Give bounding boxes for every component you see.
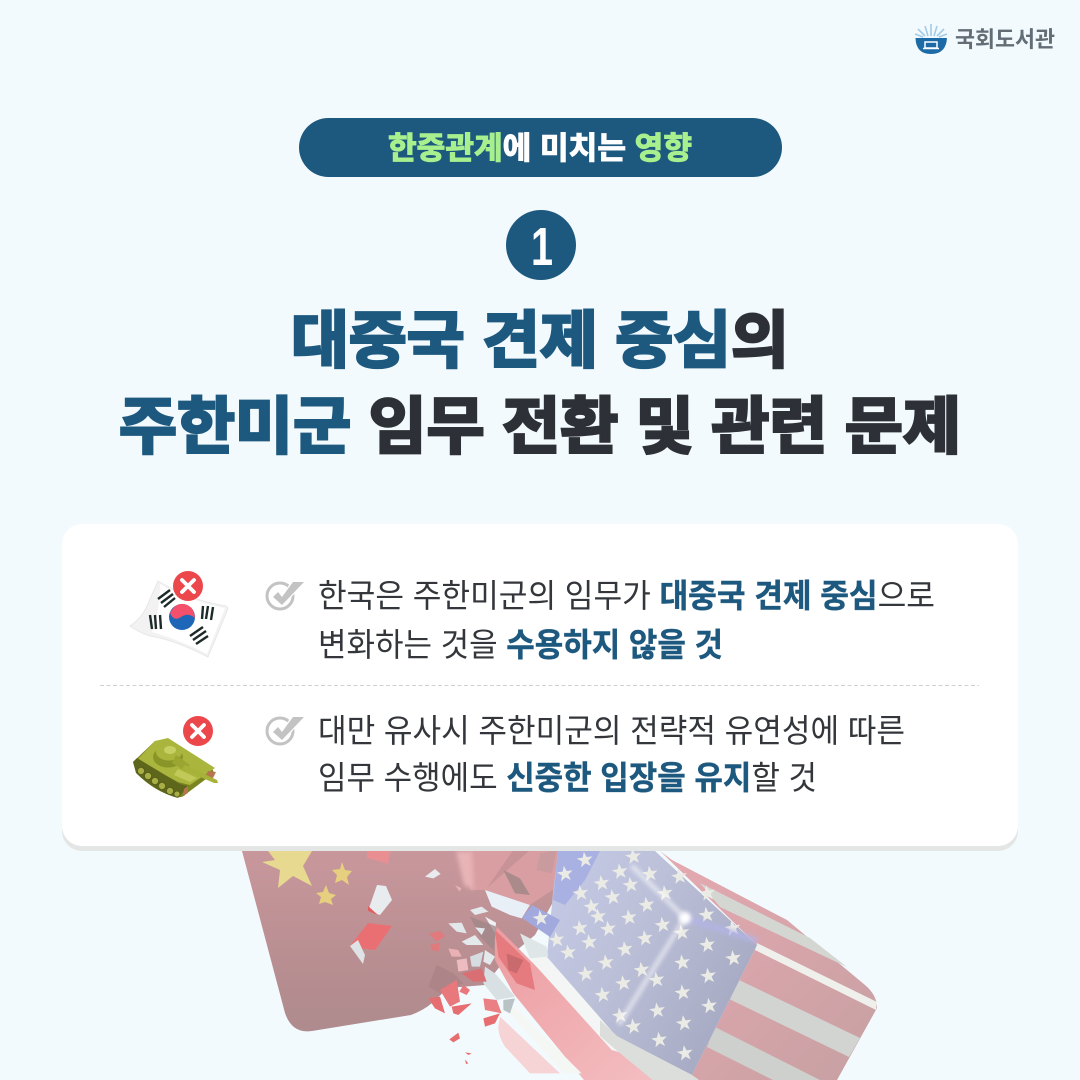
number badge: 1 <box>531 217 553 277</box>
US flag front side <box>485 890 673 1080</box>
text block: item 2: 임무 수행에도 신중한 입장을 유지할 것 <box>318 760 817 796</box>
logo emblem <box>915 24 947 54</box>
US flag right side <box>660 851 877 1080</box>
icon: check 2 <box>267 715 306 744</box>
icon: check 1 <box>267 580 306 609</box>
title line 1: 대중국 견제 중심의 <box>291 307 789 376</box>
logo wordmark: 국회도서관 <box>955 27 1055 52</box>
icon: Korean flag with X <box>130 571 228 657</box>
light flare <box>620 867 755 1023</box>
text block: item 1 <box>318 578 935 663</box>
US flag canton <box>522 847 757 1080</box>
illustration: China and US flags colliding <box>242 847 877 1080</box>
China flag block <box>242 851 565 1031</box>
heading pill <box>299 118 782 177</box>
text block: item 2: 대만 유사시 주한미군의 전략적 유연성에 따른 <box>318 713 905 749</box>
title <box>119 307 961 462</box>
heading pill: 한중관계에 미치는 영향 <box>388 131 692 166</box>
logo: 국회도서관 <box>915 24 1055 54</box>
shattered fragments <box>425 850 557 1064</box>
text block: item 2 <box>318 713 905 796</box>
text block: item 1: 한국은 주한미군의 임무가 대중국 견제 중심으로 <box>318 578 935 614</box>
stars <box>593 847 742 1061</box>
text block: item 1: 변화하는 것을 수용하지 않을 것 <box>318 627 723 663</box>
title line 2: 주한미군 임무 전환 및 관련 문제 <box>119 393 961 462</box>
icon: tank with X <box>133 716 218 798</box>
panel: card <box>62 524 1018 851</box>
number badge <box>506 210 576 280</box>
